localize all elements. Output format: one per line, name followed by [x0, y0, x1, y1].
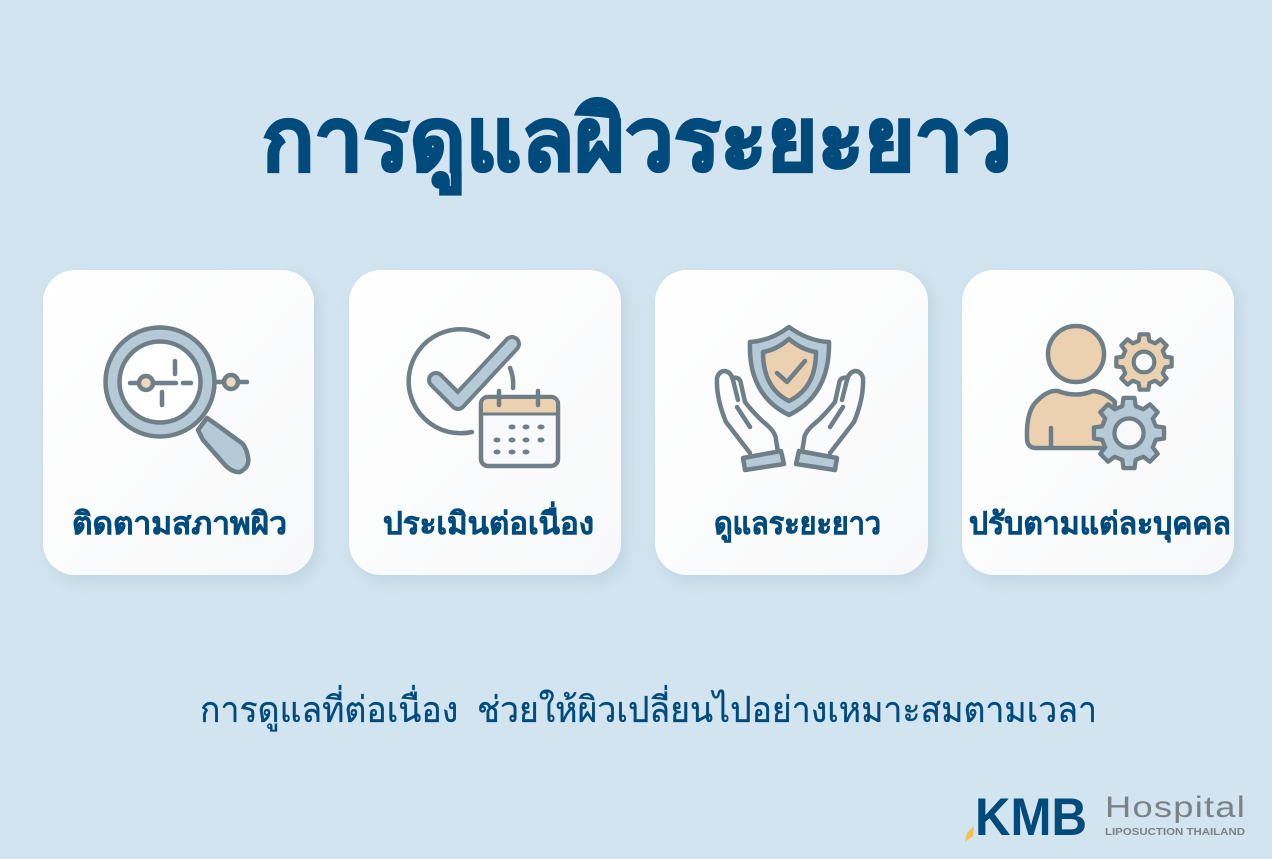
logo accent [965, 826, 974, 842]
label: ประเมินต่อเนื่อง [383, 501, 594, 541]
tagline: การดูแลที่ต่อเนื่อง ช่วยให้ผิวเปลี่ยนไปอย่างเหมาะสมตามเวลา [200, 685, 1097, 732]
logo wordmark: KMB [975, 788, 1087, 847]
panel: long-term care [655, 270, 928, 575]
label: ปรับตามแต่ละบุคคล [969, 506, 1231, 543]
logo: KMB Hospital [965, 788, 1246, 847]
icon: magnifying glass [106, 328, 248, 472]
panel: skin monitoring [43, 270, 314, 575]
title: การดูแลผิวระยะยาว [262, 90, 1012, 195]
icon: person and gears [1027, 326, 1172, 468]
panel: personalised [962, 270, 1234, 575]
label: ดูแลระยะยาว [714, 506, 881, 543]
label: ติดตามสภาพผิว [72, 506, 287, 541]
logo subtitle: LIPOSUCTION THAILAND [1105, 826, 1245, 838]
logo name: Hospital [1105, 791, 1246, 824]
panel: continuous assessment [349, 270, 621, 575]
icon: shield and hands [717, 327, 863, 470]
icon: check and calendar [409, 329, 558, 466]
